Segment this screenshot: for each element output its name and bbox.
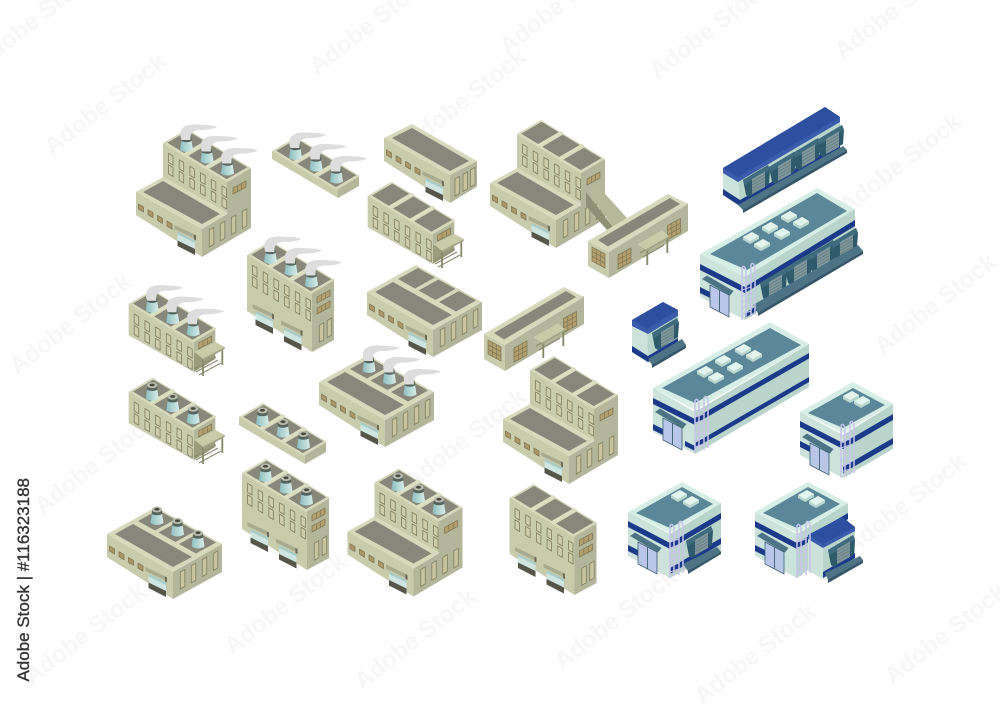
tall factory with roller doors and smoke [247, 236, 342, 352]
three bay factory with porch and smoke [129, 285, 225, 376]
long warehouse with porch, upper right [588, 194, 688, 278]
watermark pattern: Adobe Stock [4, 268, 137, 380]
watermark pattern: Adobe Stock [39, 48, 172, 160]
watermark pattern: Adobe Stock [549, 563, 682, 675]
three bay factory with porch and capped chimneys [129, 378, 225, 464]
watermark pattern: Adobe Stock [29, 408, 162, 520]
watermark pattern: Adobe Stock [839, 448, 972, 560]
wide factory with capped chimneys [107, 506, 222, 599]
wide factory with smoke [319, 345, 441, 447]
factory: three bay block with porch [368, 182, 464, 268]
low slab with capped chimneys [239, 403, 327, 464]
long warehouse with porch, centre [484, 287, 584, 371]
factory: low slab with smoking chimneys [272, 132, 368, 198]
blue warehouse: long building with striped walls [653, 322, 809, 454]
factory: tall and low block with no chimneys [490, 120, 605, 248]
watermark pattern: Adobe Stock [834, 108, 967, 220]
stock id caption: Adobe Stock | #116323188 [14, 478, 33, 682]
watermark pattern: Adobe Stock [399, 43, 532, 155]
watermark pattern: Adobe Stock [689, 598, 822, 707]
blue warehouse: long dock block with blue roof [723, 107, 847, 213]
watermark pattern: Adobe Stock [349, 583, 482, 695]
tall and low block with capped chimneys [348, 468, 462, 596]
tall and low block, centre right [503, 356, 618, 484]
factory: wide block with three roof bays [367, 265, 482, 357]
blue warehouse: large building with six roof vents [700, 188, 863, 320]
blue warehouse: compact building with dock door [628, 482, 721, 578]
watermark pattern: Adobe Stock [399, 383, 532, 495]
tall factory with roller doors, no chimneys [510, 484, 598, 595]
watermark pattern: Adobe Stock [869, 248, 1000, 360]
factory: flat single roof block [384, 124, 477, 203]
blue warehouse: medium building [800, 382, 893, 478]
conveyor ramp [586, 184, 627, 230]
blue warehouse: compact building with blue roof annex [755, 482, 863, 583]
watermark pattern: Adobe Stock [219, 548, 352, 660]
tall factory with capped chimneys [242, 459, 330, 570]
watermark pattern: Adobe Stock [19, 578, 152, 690]
factory: tall and low block with smoking chimneys [136, 124, 258, 257]
blue warehouse: small dock unit [632, 302, 686, 368]
